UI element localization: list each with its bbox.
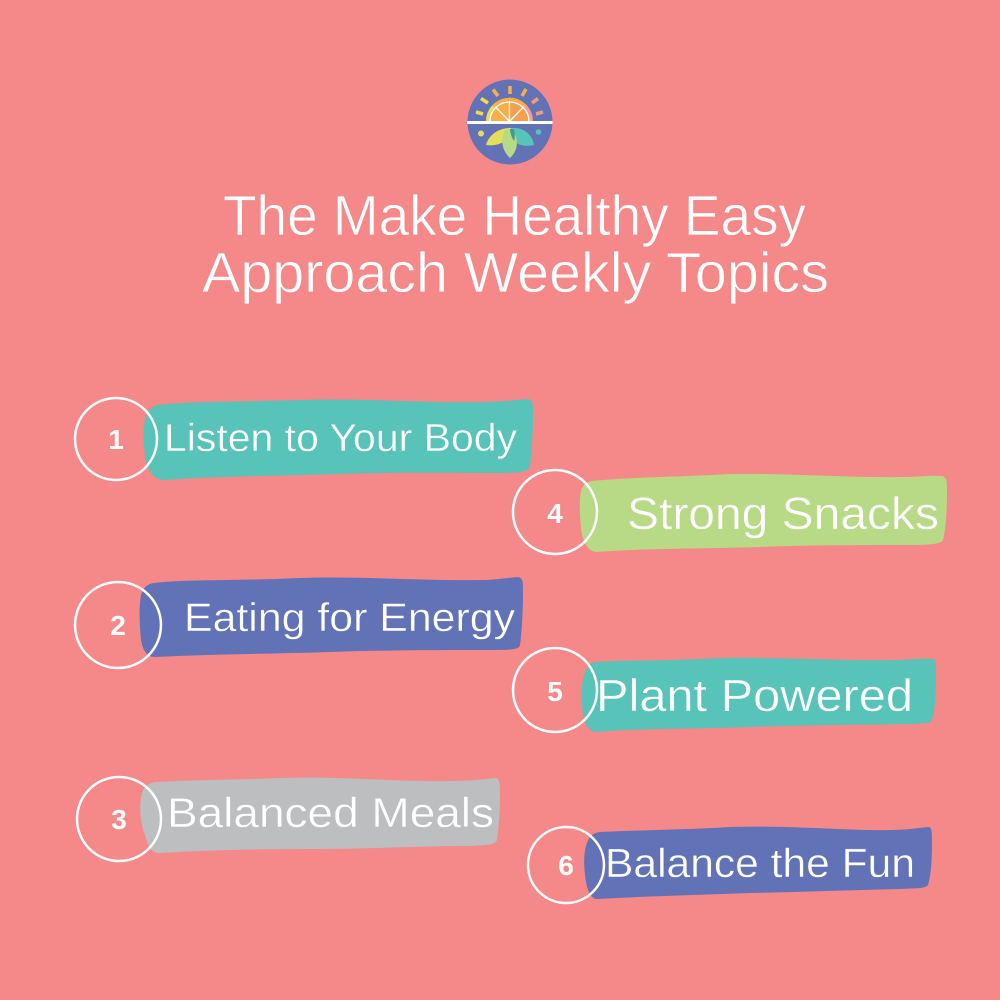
topic 6: Balance the Fun: [528, 827, 932, 903]
number circle 2: 2: [110, 610, 126, 641]
label: Plant Powered: [596, 670, 913, 721]
label: Strong Snacks: [627, 488, 939, 539]
topic 3: Balanced Meals: [77, 777, 500, 861]
number circle 6: [528, 827, 604, 903]
icon: sun rays: [476, 86, 543, 114]
label: Balance the Fun: [605, 840, 915, 886]
number circle 5: 5: [547, 676, 563, 707]
logo: [467, 80, 552, 164]
number circle 2: [75, 582, 161, 668]
icon: dots: [478, 129, 541, 136]
divider bar: [467, 121, 552, 124]
icon: leaves: [486, 128, 534, 158]
label: Listen to Your Body: [164, 417, 518, 460]
topic 1: Listen to Your Body: [75, 398, 533, 480]
brush: teal: [582, 658, 936, 732]
number circle 1: 1: [108, 424, 124, 455]
title: [202, 184, 829, 305]
label: Eating for Energy: [184, 596, 515, 640]
brush: teal: [144, 399, 533, 480]
brush: green: [580, 474, 947, 552]
number circle 4: [513, 470, 597, 554]
title: Approach Weekly Topics: [202, 241, 829, 305]
label: Balanced Meals: [167, 789, 494, 836]
brush: blue: [140, 577, 523, 657]
icon: citrus half: [486, 98, 533, 122]
number circle 3: 3: [111, 804, 127, 835]
number circle 1: [75, 398, 157, 480]
topic 2: Eating for Energy: [75, 577, 523, 668]
brush: grey: [140, 778, 500, 853]
topic 4: Strong Snacks: [513, 470, 947, 554]
number circle 5: [513, 648, 597, 732]
number circle 3: [77, 777, 161, 861]
title: The Make Healthy Easy: [223, 184, 806, 248]
number circle 4: 4: [547, 498, 563, 529]
number circle 6: 6: [558, 850, 574, 881]
topic 5: Plant Powered: [513, 648, 936, 732]
brush: blue: [584, 827, 932, 899]
